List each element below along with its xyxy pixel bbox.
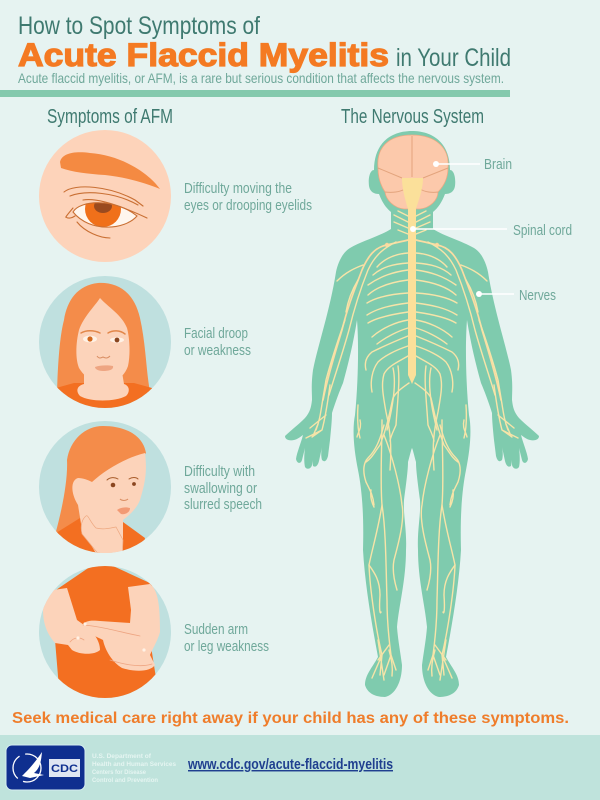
panel: eye symptom icon	[39, 130, 171, 262]
text: arm weakness symptom: Sudden arm	[184, 622, 248, 638]
text: swallowing symptom: Difficulty with	[184, 464, 255, 480]
panel: facial droop icon	[39, 276, 171, 412]
title	[18, 12, 511, 73]
title line one: How to Spot Symptoms of	[18, 12, 260, 40]
body silhouette	[285, 131, 539, 697]
text: arm weakness symptom: or leg weakness	[184, 639, 269, 655]
footer band	[0, 735, 600, 800]
agency text: U.S. Department of	[92, 753, 152, 760]
subtitle: Acute flaccid myelitis, or AFM, is a rare but serious condition that affects the nervous system.	[18, 70, 504, 86]
text: facial droop: Facial droop	[184, 326, 248, 342]
callout: brain: Brain	[484, 157, 512, 173]
callout: nerves	[476, 288, 556, 304]
nerves	[306, 211, 518, 680]
text: eye symptom	[184, 181, 312, 214]
agency text	[92, 753, 176, 784]
spinal cord	[402, 178, 423, 384]
text: eye symptom: eyes or drooping eyelids	[184, 198, 312, 214]
text: arm weakness symptom	[184, 622, 269, 655]
panel: arm weakness icon	[39, 560, 171, 700]
chart: body with nervous system	[285, 131, 539, 697]
text: facial droop: or weakness	[184, 343, 251, 359]
text: facial droop	[184, 326, 251, 359]
panel: swallowing icon	[39, 421, 171, 565]
agency text: Control and Prevention	[92, 777, 158, 784]
agency text: Health and Human Services	[92, 761, 176, 768]
callout: nerves: Nerves	[519, 288, 556, 304]
website link: www.cdc.gov/acute-flaccid-myelitis	[187, 757, 393, 773]
title line two: orange highlight: Acute Flaccid Myelitis	[18, 37, 389, 73]
header bar	[0, 90, 510, 97]
text: swallowing symptom: swallowing or	[184, 481, 257, 497]
callout: brain	[433, 157, 512, 173]
text: eye symptom: Difficulty moving the	[184, 181, 292, 197]
text: swallowing symptom: slurred speech	[184, 497, 262, 513]
heading: nervous system: The Nervous System	[341, 106, 484, 128]
heading: symptoms: Symptoms of AFM	[47, 106, 173, 128]
logo: HHS and CDC	[6, 745, 85, 790]
callout: spinal cord: Spinal cord	[513, 223, 572, 239]
agency text: Centers for Disease	[92, 769, 146, 776]
call to action: Seek medical care right away if your child has any of these symptoms.	[12, 710, 569, 727]
callout: spinal cord	[410, 223, 572, 239]
text: swallowing symptom	[184, 464, 262, 513]
logo: HHS and CDC: CDC	[51, 763, 78, 775]
title line two: suffix: in Your Child	[396, 44, 511, 72]
brain	[378, 135, 448, 384]
